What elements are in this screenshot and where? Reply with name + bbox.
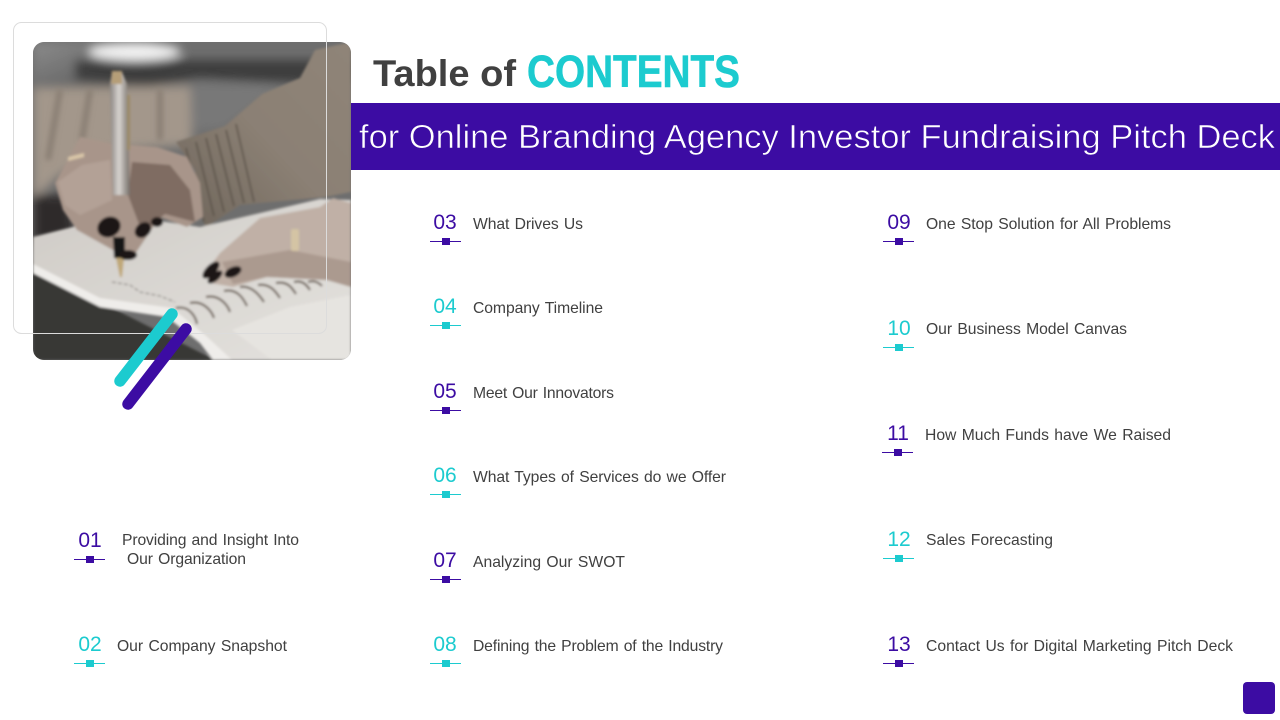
item 12: 12 [887,528,911,551]
item 11: How Much Funds have We Raised [925,427,1171,444]
sweater sleeve [176,42,351,228]
item 11: 11 [887,422,909,445]
item 06: 06 [433,464,457,487]
item 11 [882,422,1171,456]
item 13: 13 [887,633,911,656]
item 07: Analyzing Our SWOT [473,554,625,571]
title: Table of [373,53,517,94]
item 01: Our Organization [127,551,246,568]
item 13: Contact Us for Digital Marketing Pitch Deck [926,638,1233,655]
handwriting [112,282,175,302]
left hand [55,137,203,257]
item 06: What Types of Services do we Offer [473,469,726,486]
item 01 [74,529,299,568]
decorative slanted bars [120,314,186,404]
item 01: 01 [78,529,102,552]
item 13 [883,633,1233,667]
item 10 [883,317,1127,351]
item 08: 08 [433,633,457,656]
item 09: One Stop Solution for All Problems [926,216,1171,233]
item 05: Meet Our Innovators [473,385,614,402]
item 03: 03 [433,211,457,234]
item 12: Sales Forecasting [926,532,1053,549]
spiral rings [176,281,322,324]
item 05 [430,380,614,414]
item 05: 05 [433,380,457,403]
item 04 [430,295,603,329]
blurred background sleeve ribs [48,90,160,160]
item 10: Our Business Model Canvas [926,321,1127,338]
item 03 [430,211,583,245]
item 02: 02 [78,633,102,656]
thin outline frame [14,22,326,334]
table [33,270,215,360]
item 12 [883,528,1053,562]
subtitle banner: for Online Branding Agency Investor Fundraising Pitch Deck [359,118,1276,155]
item 04: Company Timeline [473,300,603,317]
item 02 [74,633,288,667]
item 07 [430,549,625,583]
item 07: 07 [433,549,457,572]
item 01: Providing and Insight Into [122,532,299,549]
nails [96,215,122,239]
item 02: Our Company Snapshot [117,638,288,655]
item 03: What Drives Us [473,216,583,233]
notebook [33,199,351,360]
pen [110,72,130,195]
item 08 [430,633,723,667]
title [373,46,740,97]
item 08: Defining the Problem of the Industry [473,638,723,655]
corner square button [1243,682,1275,714]
photo: hands writing in a spiral notebook [33,42,351,360]
subtitle banner [351,103,1280,170]
item 04: 04 [433,295,457,318]
item 10: 10 [887,317,911,340]
item 06 [430,464,726,498]
right hand [205,198,351,287]
title: CONTENTS [527,46,740,97]
item 09: 09 [887,211,911,234]
item 09 [883,211,1171,245]
